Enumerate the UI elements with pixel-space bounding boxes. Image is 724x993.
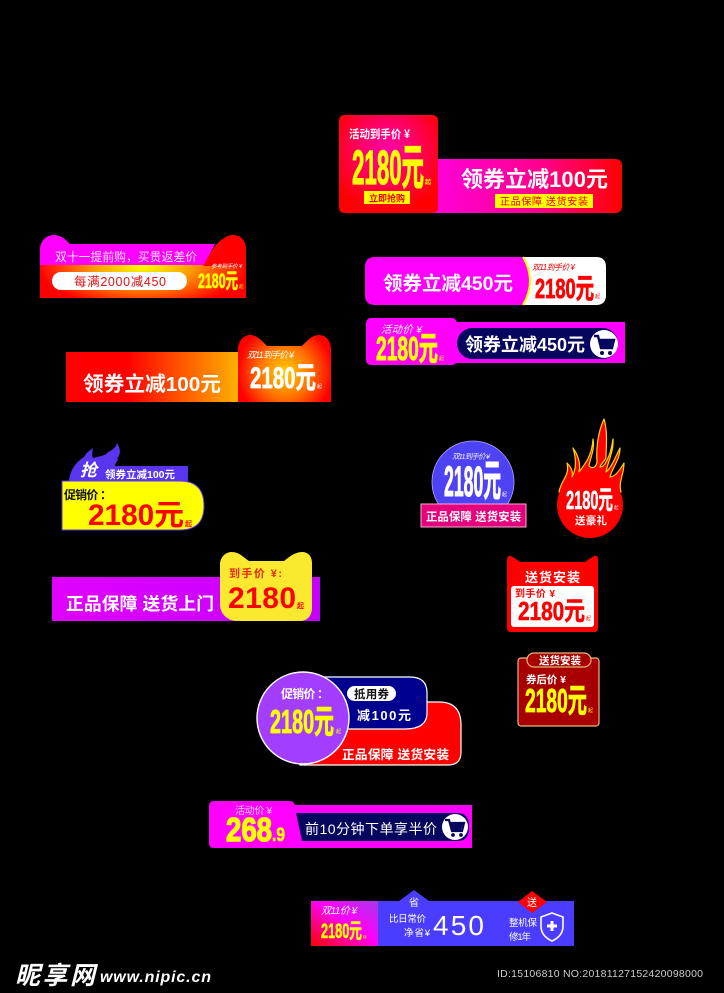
icon: flame xyxy=(559,419,624,492)
panel: coupon 450 magenta white xyxy=(365,257,606,305)
heading: 送货安装 xyxy=(525,570,580,585)
heading: 领券立减450元 xyxy=(465,334,585,355)
card xyxy=(518,658,599,726)
pill text: 每满2000减450 xyxy=(74,274,166,289)
panel: coupon 100 cat ear xyxy=(66,335,331,402)
blue band xyxy=(311,901,574,946)
net saving: 净省¥ xyxy=(404,927,431,939)
price: 2180元 xyxy=(250,362,316,395)
panel: price compare banner xyxy=(311,890,574,946)
price: 2180元 xyxy=(376,330,438,367)
coupon text: 领券立减100元 xyxy=(105,468,176,481)
white box xyxy=(511,586,594,627)
label: 到手价 ¥ xyxy=(515,587,555,600)
panel: genuine guarantee yellow cat xyxy=(52,552,320,621)
label: 双11价 ¥ xyxy=(321,905,358,917)
buy button: 立即抢购 xyxy=(369,192,405,204)
suffix: 起 xyxy=(502,492,507,498)
yellow cat card xyxy=(220,552,312,621)
suffix: 起 xyxy=(425,178,431,186)
panel: dark red card xyxy=(518,653,599,726)
buy button xyxy=(364,191,410,204)
suffix: 起 xyxy=(588,708,593,714)
suffix: 起 xyxy=(297,601,304,610)
warranty year: 修1年 xyxy=(509,931,531,943)
heading: 领券立减450元 xyxy=(383,272,513,295)
panel: coupon 100 red magenta xyxy=(339,115,622,213)
panel: flame yellow promo xyxy=(62,443,204,532)
heading: 领券立减100元 xyxy=(461,167,608,192)
panel: coupon 100 red magenta: 2180元 xyxy=(352,142,424,195)
band xyxy=(52,577,320,621)
suffix: 起 xyxy=(614,505,619,511)
suffix: 起 xyxy=(586,616,591,622)
amount: 450 xyxy=(433,910,484,941)
panel: blue circle badge xyxy=(421,441,526,527)
price: 2180 xyxy=(228,582,296,615)
price: 2180元 xyxy=(525,682,587,719)
guarantee tag: 正品保障 送货安装 xyxy=(500,195,588,208)
warranty: 整机保 xyxy=(509,917,537,929)
label: 参考到手价 ¥ xyxy=(211,263,243,270)
label: 促销价 ： xyxy=(64,487,112,502)
image id: ID:15106810 NO:20181127152420098000 xyxy=(497,968,703,980)
save tag xyxy=(399,890,429,909)
yellow curve xyxy=(523,257,530,305)
price: 2180元 xyxy=(88,499,184,532)
card xyxy=(507,556,598,632)
tag xyxy=(421,504,526,527)
label: 活动价 ¥ xyxy=(235,805,272,817)
white price area xyxy=(515,257,606,305)
navy box xyxy=(320,677,427,729)
magenta top with ear xyxy=(40,235,215,265)
site name: 昵享网 xyxy=(15,962,99,990)
price: 2180元 xyxy=(518,596,585,626)
top pill xyxy=(527,653,591,667)
white pill xyxy=(52,272,187,290)
voucher pill: 抵用券 xyxy=(354,687,390,701)
heading: 正品保障 送货上门 xyxy=(66,593,214,614)
pill text: 送货安装 xyxy=(539,654,582,667)
right band xyxy=(430,159,622,213)
decimal: .9 xyxy=(272,825,285,846)
panel: activity price half off xyxy=(209,801,472,848)
text: 双十一提前购，买贵返差价 xyxy=(55,250,197,264)
band xyxy=(66,352,240,402)
label: 双11到手价 ¥ xyxy=(247,350,295,360)
red ear xyxy=(203,235,246,266)
label: 券后价 ¥ xyxy=(526,673,566,686)
gift text: 送豪礼 xyxy=(575,514,608,527)
ear card xyxy=(238,335,331,402)
panel: fire badge xyxy=(557,419,624,538)
price: 2180元 xyxy=(321,920,362,943)
heading: 前10分钟下单享半价 xyxy=(305,821,437,837)
circle xyxy=(432,441,514,523)
panel: red cat delivery card xyxy=(507,556,598,632)
panel: purple circle layered xyxy=(257,672,461,765)
band xyxy=(280,805,472,848)
circle xyxy=(557,472,623,538)
tab xyxy=(366,318,457,365)
navy pill xyxy=(457,328,618,359)
price: 2180元 xyxy=(535,273,594,304)
suffix: 起 xyxy=(239,284,244,290)
purple circle xyxy=(257,672,349,764)
suffix: 起 xyxy=(317,384,322,390)
discount: 减100元 xyxy=(357,708,411,723)
label: 到手价 ¥: xyxy=(229,566,282,580)
suffix: 起 xyxy=(185,519,192,528)
compare text: 比日常价 xyxy=(389,913,426,925)
icon: blue flame xyxy=(69,443,188,481)
suffix: 起 xyxy=(595,294,600,300)
icon: cart xyxy=(590,330,618,358)
panel: double eleven presale banner xyxy=(40,235,246,298)
band xyxy=(440,322,625,363)
magenta area with yellow curve xyxy=(365,257,530,305)
gradient price xyxy=(311,901,378,946)
gift diamond: 送 xyxy=(527,896,537,909)
navy banner xyxy=(296,813,469,841)
gift diamond xyxy=(518,891,547,913)
price: 268 xyxy=(226,811,272,848)
suffix: 起 xyxy=(363,934,367,939)
suffix: 起 xyxy=(336,729,341,735)
guarantee: 正品保障 送货安装 xyxy=(342,747,449,762)
icon: shield xyxy=(541,913,563,941)
price: 2180元 xyxy=(566,485,613,515)
suffix: 起 xyxy=(439,356,444,362)
tag text: 正品保障 送货安装 xyxy=(426,510,521,524)
save tag: 省 xyxy=(409,896,419,909)
yellow card xyxy=(62,481,204,530)
price: 2180元 xyxy=(198,270,238,293)
grab: 抢 xyxy=(80,461,99,480)
icon: cart xyxy=(442,814,468,840)
label: 促销价 ： xyxy=(281,686,329,701)
url: www.nipic.cn xyxy=(100,969,211,986)
label: 双11到手价 ¥ xyxy=(452,452,491,461)
left price card xyxy=(339,115,438,213)
label: 双11到手价 ¥ xyxy=(532,263,577,272)
heading: 领券立减100元 xyxy=(83,372,221,396)
gradient body xyxy=(40,265,246,298)
label: 活动价 ¥ xyxy=(381,324,423,336)
panel: blue circle badge: 2180元 xyxy=(444,458,501,506)
watermark logo xyxy=(15,962,211,990)
tab xyxy=(209,801,295,848)
red box xyxy=(300,702,461,765)
label: 活动到手价 ¥ xyxy=(349,127,411,141)
price: 2180元 xyxy=(270,703,334,740)
panel: coupon 450 navy pill xyxy=(366,318,625,367)
voucher pill xyxy=(347,686,396,701)
